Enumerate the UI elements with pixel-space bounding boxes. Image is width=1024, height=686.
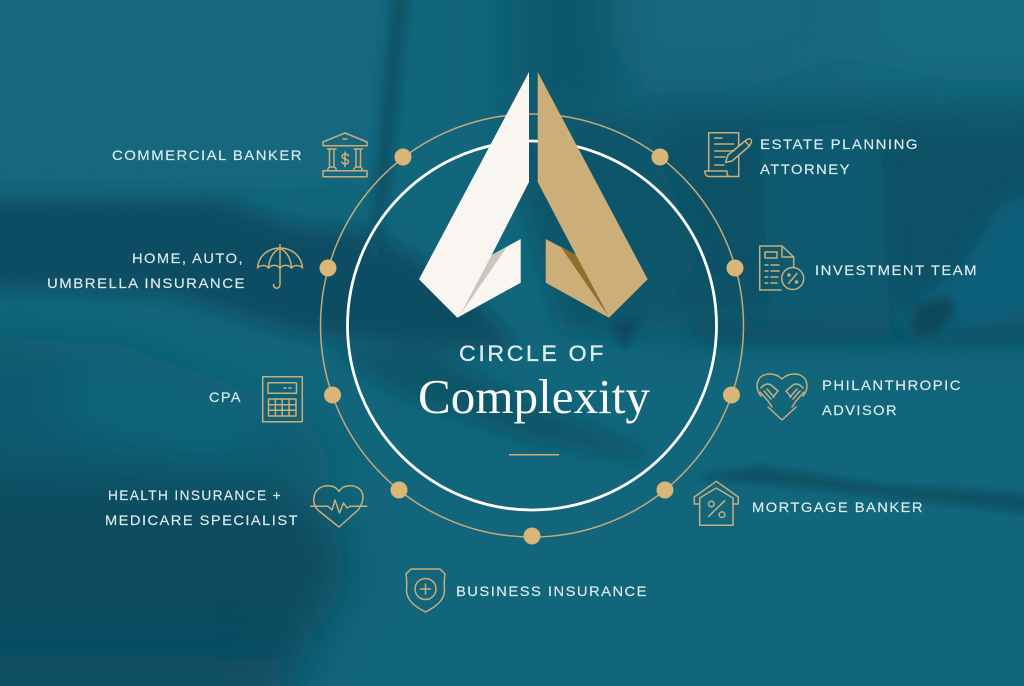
icon: document with percent bbox=[760, 246, 804, 290]
label: home, auto, umbrella insurance: UMBRELLA INSURANCE bbox=[47, 275, 246, 291]
label: estate planning attorney bbox=[760, 136, 919, 177]
label: estate planning attorney: ATTORNEY bbox=[760, 161, 851, 177]
label: commercial banker: COMMERCIAL BANKER bbox=[112, 147, 303, 163]
icon: bank bbox=[323, 133, 367, 177]
icon: hands forming a heart bbox=[757, 374, 807, 420]
ring nodes bbox=[320, 148, 744, 544]
title divider bbox=[509, 454, 559, 456]
label: health insurance, medicare specialist: HEALTH INSURANCE + bbox=[108, 487, 282, 503]
label: investment team: INVESTMENT TEAM bbox=[815, 262, 978, 278]
icon: umbrella bbox=[258, 244, 302, 288]
label: estate planning attorney: ESTATE PLANNING bbox=[760, 136, 919, 152]
icon: legal document and pen bbox=[705, 133, 752, 176]
title: CIRCLE OF bbox=[459, 341, 606, 366]
lower-left edge shade bbox=[0, 600, 280, 686]
icon: calculator bbox=[263, 377, 302, 422]
label: health insurance, medicare specialist bbox=[105, 487, 299, 528]
label: home, auto, umbrella insurance: HOME, AUTO, bbox=[132, 250, 244, 266]
label: cpa: CPA bbox=[209, 389, 242, 405]
label: mortgage banker: MORTGAGE BANKER bbox=[752, 499, 924, 515]
label: philanthropic advisor: PHILANTHROPIC bbox=[822, 377, 962, 393]
logo bbox=[419, 72, 648, 318]
icon: shield bbox=[406, 569, 445, 612]
label: philanthropic advisor bbox=[822, 377, 962, 418]
icon: house with percent bbox=[694, 481, 738, 525]
title bbox=[418, 341, 650, 424]
outer gold ring bbox=[320, 114, 744, 537]
inner white ring bbox=[348, 141, 716, 510]
label: philanthropic advisor: ADVISOR bbox=[822, 402, 898, 418]
title: Complexity bbox=[418, 369, 650, 424]
icon: heart with pulse bbox=[311, 486, 367, 527]
label: health insurance, medicare specialist: MEDICARE SPECIALIST bbox=[105, 512, 299, 528]
label: business insurance: BUSINESS INSURANCE bbox=[456, 583, 648, 599]
label: home, auto, umbrella insurance bbox=[47, 250, 246, 291]
